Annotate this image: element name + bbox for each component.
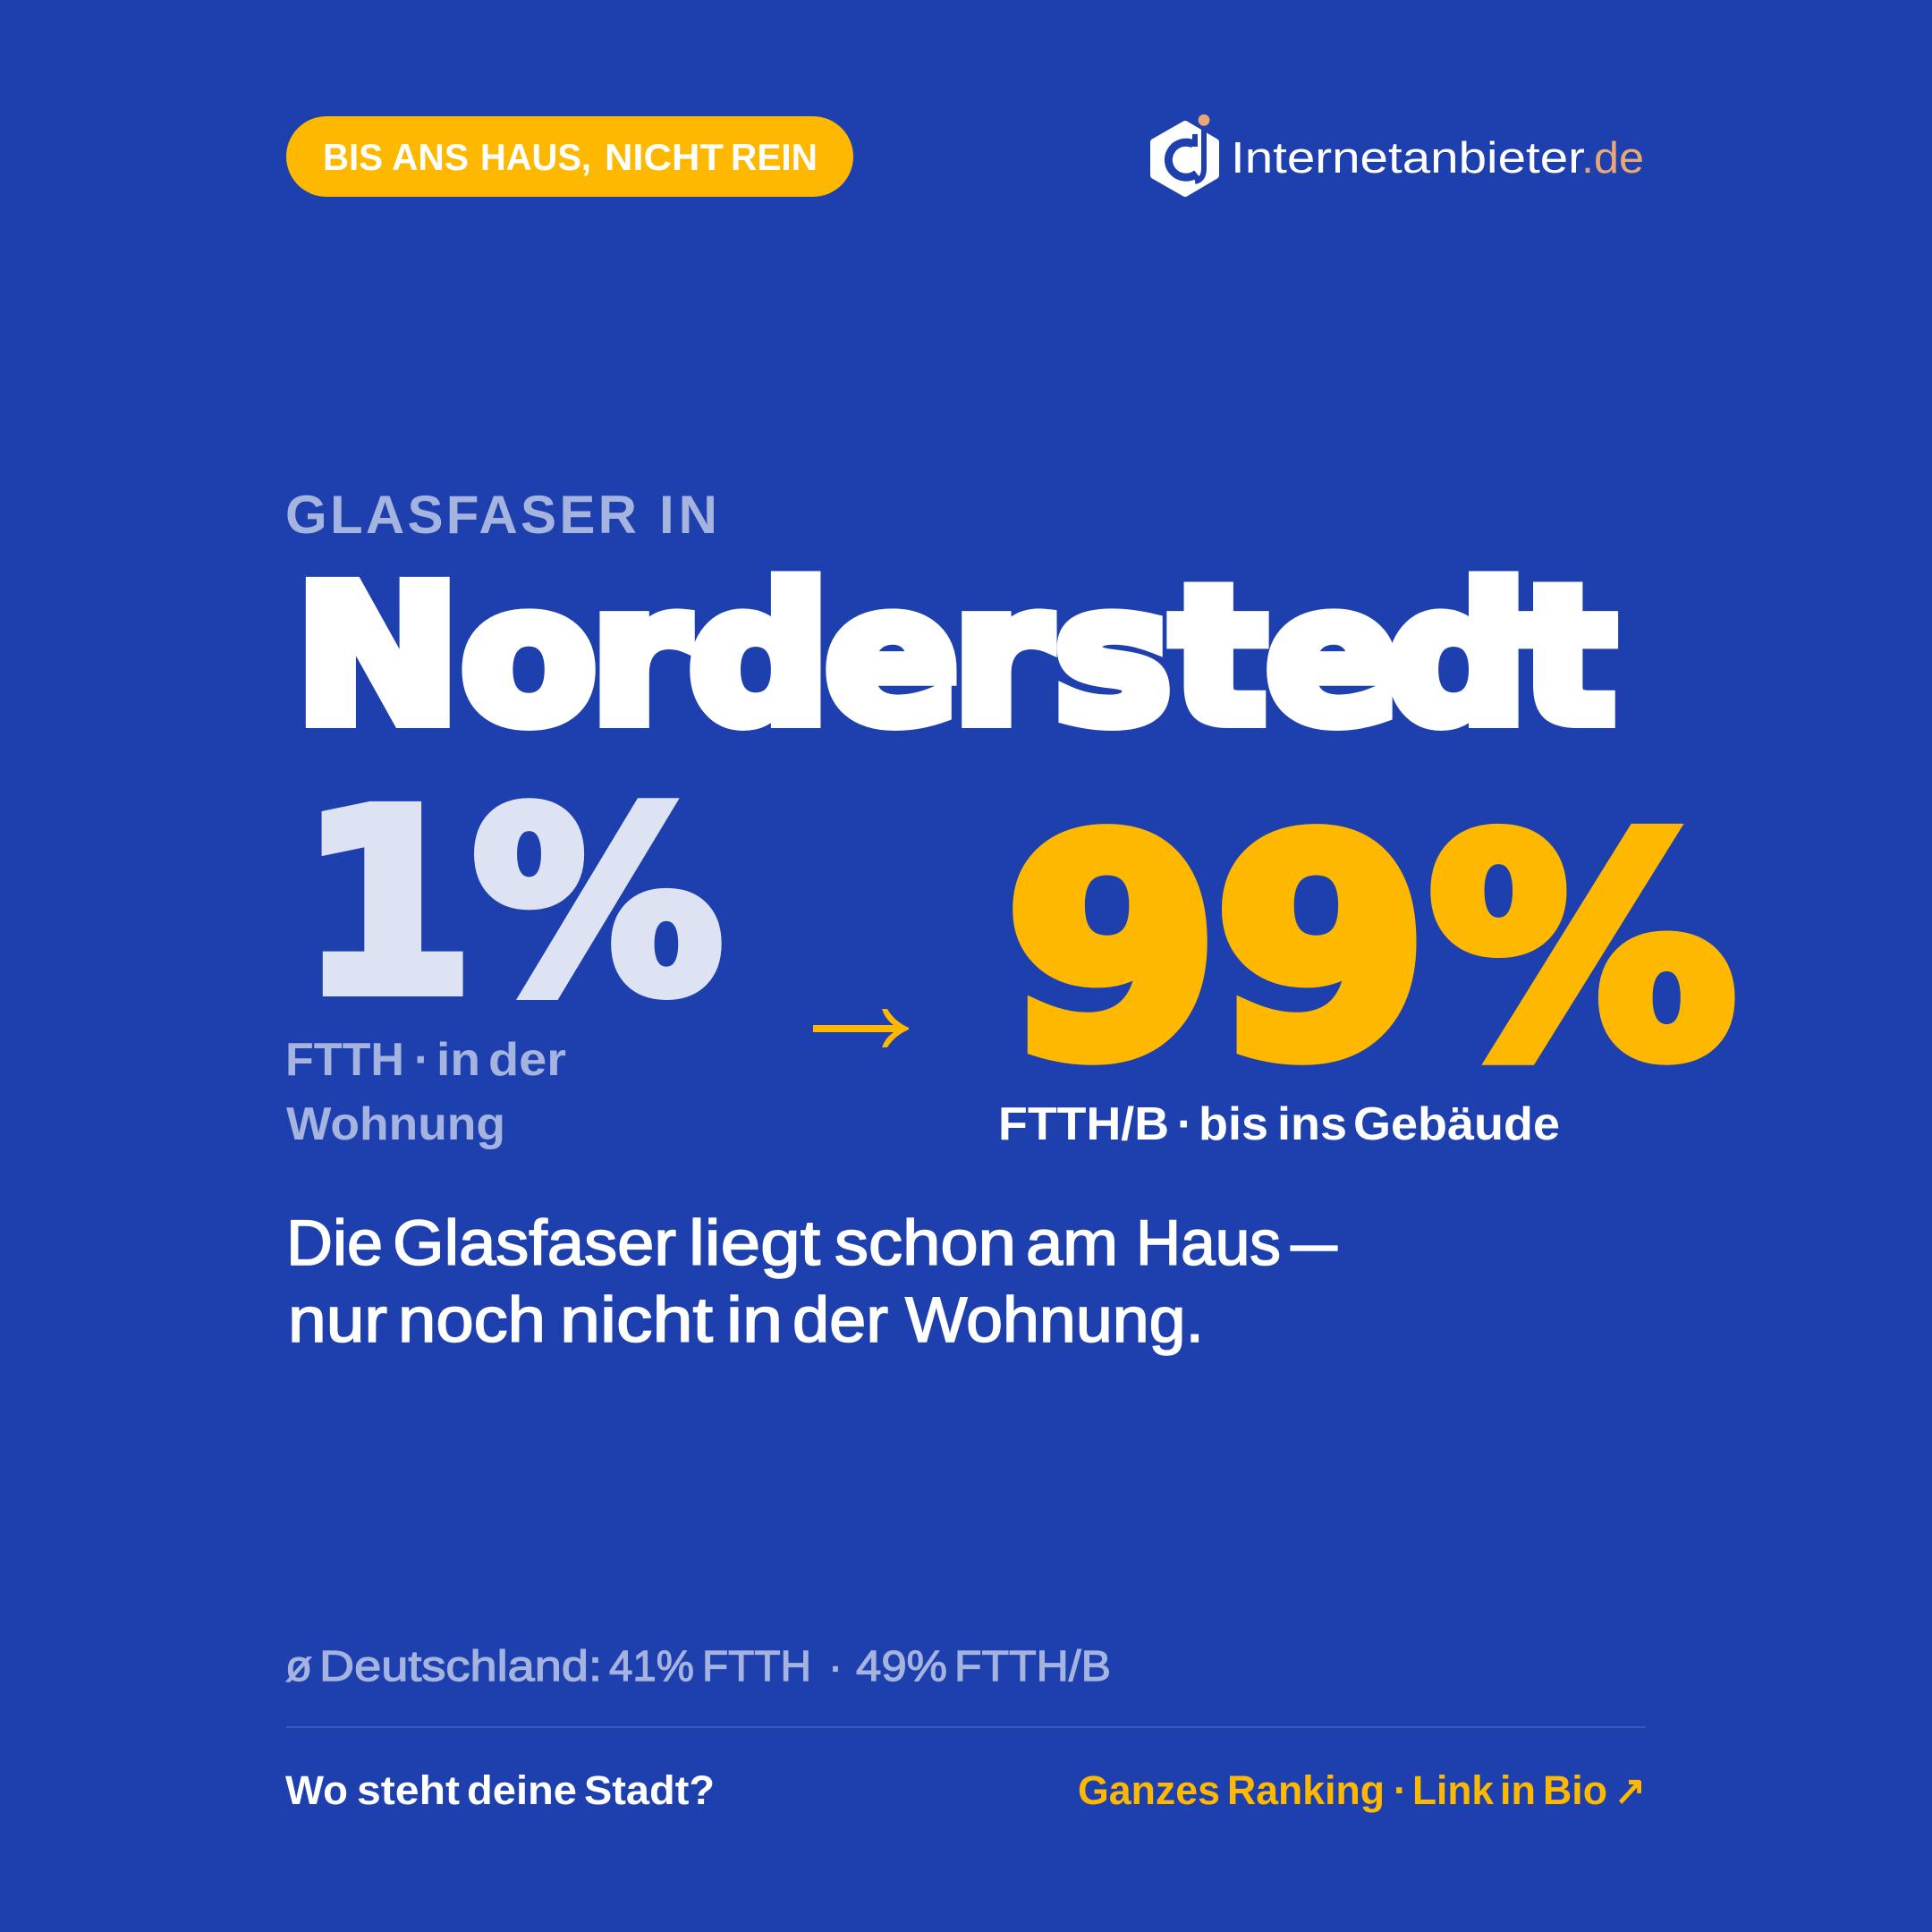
Germany average note: FTTH/B [954,1643,1111,1690]
headline text: Die [286,1208,383,1279]
badge: Bis ans Haus, nicht rein: ANS [392,136,469,178]
headline text: Haus [1136,1208,1281,1279]
footer link: Ganzes [1078,1767,1220,1813]
headline text: schon [835,1208,1016,1279]
badge: Bis ans Haus, nicht rein: REIN [731,136,818,178]
footer link: Ranking [1227,1767,1385,1813]
badge: Bis ans Haus, nicht rein: NICHT [605,136,724,178]
label: FTTH/B bis ins Gebäude: Gebäude [1353,1098,1560,1150]
badge: Bis ans Haus, nicht rein: HAUS, [480,136,591,178]
footer question: Wo [285,1767,348,1813]
eyebrow: Glasfaser in: GLASFASER [285,485,637,545]
label: FTTH/B bis ins Gebäude: bis [1199,1098,1268,1150]
big number 99%: 99% [1005,776,1736,1123]
label: FTTH/B bis ins Gebäude: ins [1277,1098,1347,1150]
headline text: nur [288,1285,387,1356]
Germany average note: 49% [856,1643,947,1690]
footer question: steht [357,1767,460,1813]
logo wordmark: Internetanbieter [1231,134,1585,182]
headline text: Wohnung. [905,1285,1204,1356]
headline text: liegt [689,1208,820,1279]
footer link: ↗ [1614,1767,1646,1813]
Germany average note: ø [285,1643,312,1690]
footer link: Link [1412,1767,1495,1813]
headline text: — [1291,1208,1337,1279]
footer link: · [1394,1767,1407,1813]
headline text: in [726,1285,783,1356]
footer question: deine [467,1767,577,1813]
Germany average note: · [828,1643,843,1690]
label: FTTH in der Wohnung: Wohnung [286,1098,505,1150]
arrow [813,1009,909,1047]
Germany average note: 41% [609,1643,694,1690]
label: FTTH in der Wohnung: · [414,1034,429,1086]
footer link: Bio [1543,1767,1607,1813]
label: FTTH in der Wohnung: in [436,1034,480,1086]
badge: Bis ans Haus, nicht rein [286,116,853,197]
headline text: der [792,1285,888,1356]
Germany average note: FTTH [702,1643,811,1690]
icon: hexagon d mark [1154,114,1216,193]
headline text: Glasfaser [393,1208,676,1279]
headline text: noch [398,1285,546,1356]
footer link: in [1500,1767,1536,1813]
footer question: Stadt? [584,1767,715,1813]
logo wordmark: .de [1581,134,1644,182]
Germany average note: Deutschland: [319,1643,602,1690]
headline text: am [1026,1208,1118,1279]
headline text: nicht [560,1285,713,1356]
logo: Internetanbieter.de [1154,114,1644,193]
title: Norderstedt: Norderstedt [295,547,1615,766]
label: FTTH in der Wohnung: der [488,1034,566,1086]
label: FTTH/B bis ins Gebäude: · [1177,1098,1192,1150]
stat: 1% FTTH in der Wohnung [285,758,724,1150]
badge: Bis ans Haus, nicht rein: BIS [323,136,383,178]
label: FTTH in der Wohnung: FTTH [285,1034,404,1086]
label: FTTH/B bis ins Gebäude: FTTH/B [998,1098,1169,1150]
big number 1%: 1% [300,758,724,1050]
stat: 99% FTTH/B bis ins Gebäude [998,776,1736,1150]
eyebrow: Glasfaser in: IN [659,485,717,545]
